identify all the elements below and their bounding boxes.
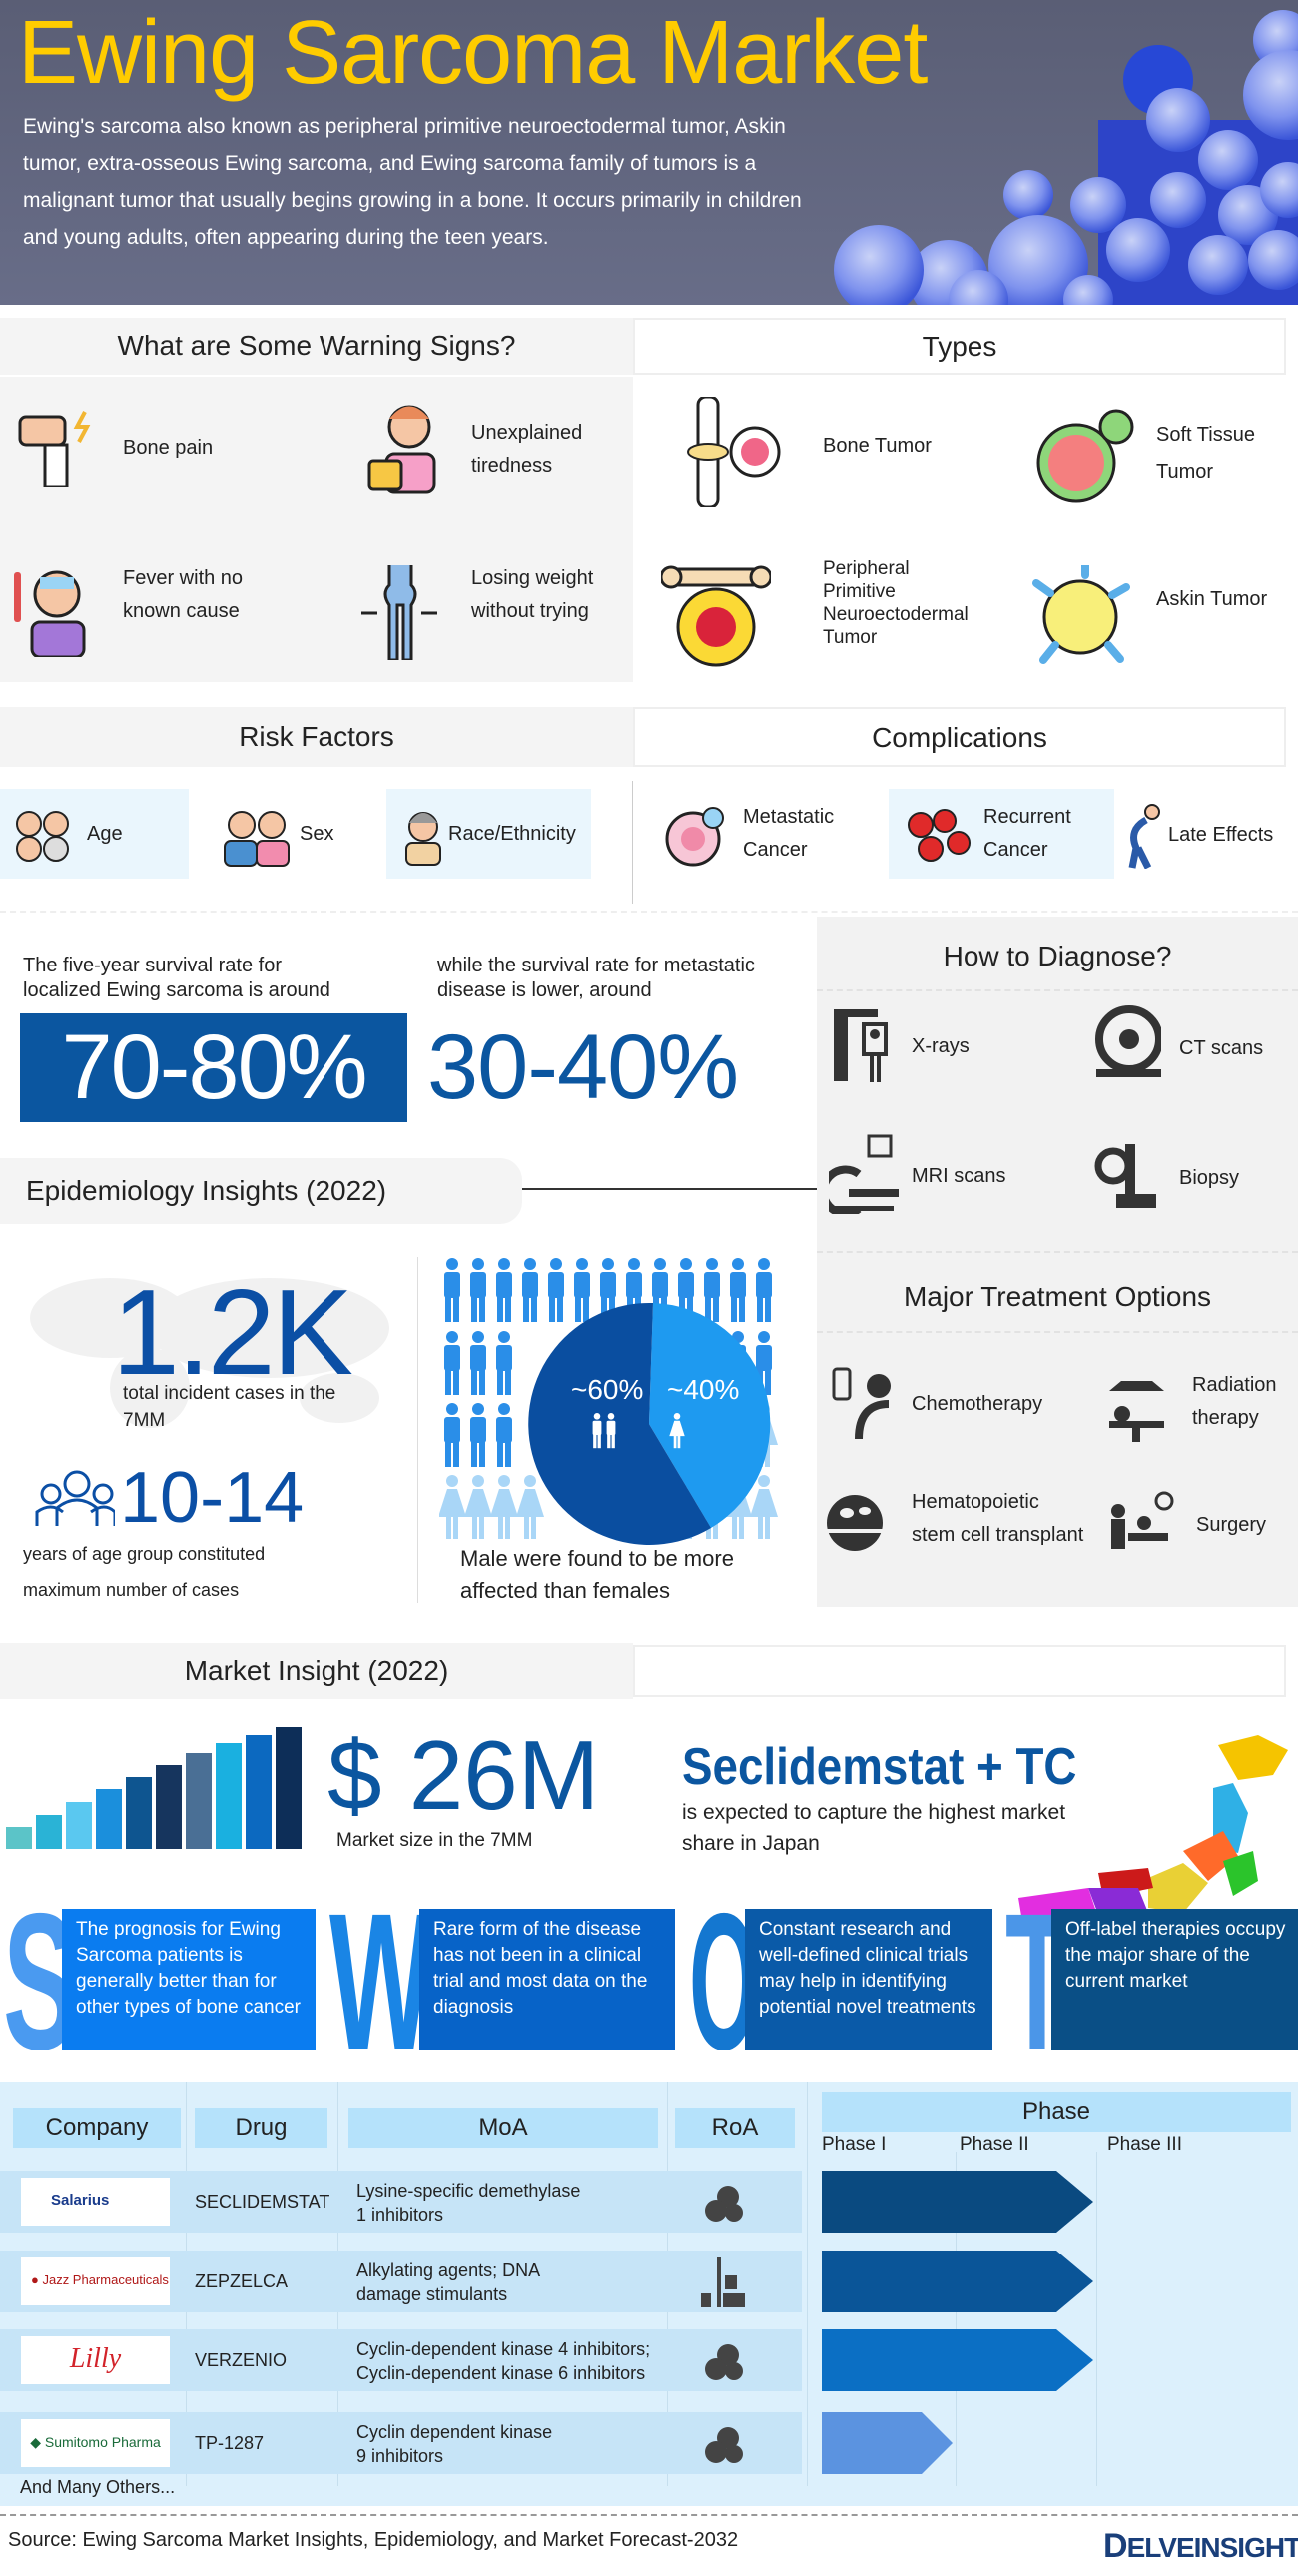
item: sex — [224, 811, 333, 867]
caption: gender — [460, 1546, 734, 1603]
stat: 10-14 — [23, 1458, 304, 1600]
source footnote: Source: Ewing Sarcoma Market Insights, Epidemiology, and Market Forecast-2032 — [8, 2529, 738, 2551]
icon: losing weight — [361, 565, 437, 660]
row: zepzelca: Alkylating agents; DNA — [356, 2260, 540, 2280]
item: hematopoietic stem cell transplant: stem cell transplant — [912, 1524, 1083, 1546]
row: seclidemstat — [0, 2171, 802, 2233]
table: pipeline: Drug — [235, 2114, 288, 2141]
survival localized text: The five-year survival rate for — [23, 955, 282, 976]
item: biopsy — [1094, 1144, 1239, 1208]
row: verzenio: Lilly — [70, 2343, 121, 2374]
item: x-rays — [834, 1009, 970, 1082]
table: pipeline: Phase I — [822, 2134, 886, 2155]
row: verzenio — [0, 2329, 802, 2391]
phase header: Phase — [1022, 2098, 1090, 2125]
survival metastatic text: while the survival rate for metastatic — [437, 955, 755, 976]
text: Market size in the 7MM — [336, 1830, 532, 1851]
heading: warning signs: What are Some Warning Signs? — [118, 330, 515, 361]
text: askin tumor: Askin Tumor — [1156, 588, 1267, 610]
stat: 1.2K: 7MM — [123, 1410, 165, 1431]
item: age: Age — [87, 823, 123, 845]
chart: gender pie with people grid: ~40% — [667, 1374, 739, 1405]
row: seclidemstat: Salarius — [51, 2192, 109, 2209]
row: verzenio: Cyclin-dependent kinase 4 inhibitors; — [356, 2339, 650, 2359]
table headers — [13, 2108, 181, 2148]
text: fever: Fever with no — [123, 567, 243, 589]
text: tiredness: Unexplained — [471, 422, 582, 444]
callout: seclidemstat — [682, 1738, 1076, 1855]
heading: types: Types — [923, 331, 996, 362]
heading: epidemiology — [0, 1158, 522, 1224]
swot: threats: Off-label therapies occupy the major share of the current market — [1065, 1919, 1285, 1992]
item: metastatic cancer — [665, 806, 834, 867]
table: pipeline: Phase III — [1107, 2134, 1182, 2155]
stat: 70-80%: 70-80% — [61, 1016, 366, 1118]
item: ct scans — [1095, 1005, 1263, 1077]
text: fever: known cause — [123, 600, 240, 622]
item: recurrent cancer: Cancer — [983, 839, 1047, 861]
icon: bone tumor — [687, 397, 781, 507]
item: age — [0, 789, 189, 879]
swot: strengths: The prognosis for Ewing Sarcoma patients is generally better than for other types of bone cancer — [76, 1919, 301, 2018]
text: PPNET — [823, 558, 969, 648]
item: mri scans — [829, 1134, 1005, 1214]
text: soft tissue tumor: Soft Tissue — [1156, 424, 1255, 446]
icon: soft tissue tumor — [1036, 409, 1134, 503]
item: recurrent cancer — [889, 789, 1114, 879]
icon: tiredness — [367, 405, 435, 493]
row: seclidemstat: Lysine-specific demethylase — [356, 2181, 580, 2201]
header banner — [0, 0, 1298, 305]
callout: seclidemstat: Seclidemstat + TC — [682, 1738, 1076, 1796]
item: race/ethnicity — [386, 789, 591, 879]
item: mri scans: MRI scans — [912, 1165, 1005, 1187]
item: race/ethnicity: Race/Ethnicity — [448, 823, 576, 845]
row: zepzelca: ● Jazz Pharmaceuticals — [31, 2272, 169, 2287]
stat: 30-40%: 30-40% — [427, 1016, 738, 1118]
swot: opportunities — [687, 1909, 992, 2050]
row: tp-1287: TP-1287 — [195, 2433, 264, 2453]
row: zepzelca: damage stimulants — [356, 2284, 507, 2304]
heading: major treatment options: Major Treatment Options — [904, 1281, 1211, 1312]
item: late effects: Late Effects — [1168, 824, 1273, 846]
text: tiredness — [471, 422, 582, 477]
icon: PPNET — [661, 565, 771, 667]
row: zepzelca: ZEPZELCA — [195, 2271, 288, 2291]
icon: bone pain — [18, 411, 90, 487]
item: chemotherapy: Chemotherapy — [912, 1393, 1042, 1415]
text: losing weight: without trying — [471, 600, 589, 622]
item: radiation therapy — [1109, 1374, 1277, 1442]
panel: complications — [633, 707, 1286, 879]
stat: $26M: $ 26M — [327, 1720, 599, 1830]
phase header — [822, 2092, 1291, 2132]
item: chemotherapy — [833, 1368, 1042, 1439]
logo: delveinsight: DELVEINSIGHT — [1103, 2527, 1298, 2565]
item: surgery: Surgery — [1196, 1514, 1266, 1536]
item: metastatic cancer: Metastatic — [743, 806, 834, 828]
table: pipeline: RoA — [712, 2114, 758, 2141]
item: x-rays: X-rays — [912, 1035, 970, 1057]
callout: seclidemstat: is expected to capture the highest market — [682, 1801, 1065, 1824]
row: seclidemstat: SECLIDEMSTAT — [195, 2192, 329, 2212]
item: hematopoietic stem cell transplant — [827, 1491, 1084, 1551]
stat: 1.2K: 1.2K — [112, 1264, 350, 1400]
survival metastatic text — [437, 955, 755, 1001]
heading: how to diagnose: How to Diagnose? — [944, 941, 1171, 971]
heading: risk factors: Risk Factors — [239, 721, 394, 752]
row: tp-1287: 9 inhibitors — [356, 2446, 443, 2466]
survival localized text — [23, 955, 330, 1001]
panel: diagnose & treatment — [817, 917, 1298, 1607]
icon: japan map — [1018, 1735, 1288, 1915]
stat: 1.2K: total incident cases in the — [123, 1383, 335, 1404]
text: tiredness: tiredness — [471, 455, 552, 477]
table: pipeline — [0, 2082, 1298, 2506]
text: soft tissue tumor: Tumor — [1156, 461, 1213, 483]
item: radiation therapy: Radiation — [1192, 1374, 1277, 1396]
heading: epidemiology: Epidemiology Insights (2022) — [26, 1175, 386, 1206]
item: metastatic cancer: Cancer — [743, 839, 807, 861]
caption: gender: Male were found to be more — [460, 1546, 734, 1571]
item: late effects — [1128, 804, 1273, 869]
item: recurrent cancer: Recurrent — [983, 806, 1071, 828]
row: tp-1287 — [0, 2412, 802, 2474]
text: bone pain: Bone pain — [123, 437, 213, 459]
icon: fever — [14, 571, 86, 657]
text: losing weight — [471, 567, 593, 622]
heading: risk factors — [0, 707, 633, 767]
text: bone tumor: Bone Tumor — [823, 435, 932, 457]
intro text: Ewing's sarcoma also known as peripheral primitive neuroectodermal tumor, Askin tumor, extra-osseous Ewing sarcoma, and Ewing sarcoma family of tumors is a malignant tumor that usually begins growing in a bone. It occurs primarily in children and young adults, often appearing during the teen years. — [23, 115, 802, 249]
text: PPNET: Neuroectodermal — [823, 604, 969, 625]
survival metastatic text: disease is lower, around — [437, 979, 652, 1001]
heading: types — [633, 318, 1286, 375]
item: biopsy: Biopsy — [1179, 1167, 1239, 1189]
text: and many others: And Many Others... — [20, 2477, 175, 2497]
decorative bubbles — [834, 10, 1298, 305]
swot: weaknesses — [324, 1909, 675, 2050]
panel: warning signs — [0, 318, 633, 682]
panel: risk factors — [0, 707, 633, 879]
text: losing weight: Losing weight — [471, 567, 593, 589]
row: tp-1287: Cyclin dependent kinase — [356, 2422, 552, 2442]
stat: 10-14: 10-14 — [120, 1458, 304, 1538]
swot: weaknesses: Rare form of the disease has not been in a clinical trial and most data on the diagnosis — [433, 1919, 647, 2018]
row: verzenio: Cyclin-dependent kinase 6 inhibitors — [356, 2363, 645, 2383]
survival localized text: localized Ewing sarcoma is around — [23, 979, 330, 1001]
heading: complications: Complications — [872, 722, 1047, 753]
chart: gender pie with people grid: ~60% — [571, 1374, 643, 1405]
row: zepzelca — [0, 2251, 802, 2312]
row: tp-1287: ◆ Sumitomo Pharma — [30, 2434, 161, 2450]
text: PPNET: Peripheral — [823, 558, 910, 579]
item: ct scans: CT scans — [1179, 1037, 1263, 1059]
bar chart: market growth — [6, 1727, 302, 1849]
heading: warning signs — [0, 318, 633, 375]
heading: complications — [633, 707, 1286, 767]
caption: gender: affected than females — [460, 1578, 670, 1603]
table: pipeline: Phase II — [960, 2134, 1029, 2155]
stat: 10-14: maximum number of cases — [23, 1580, 239, 1600]
swot: strengths — [3, 1909, 316, 2050]
swot: opportunities: Constant research and well-defined clinical trials may help in identifying potential novel treatments — [759, 1919, 976, 2018]
text: soft tissue tumor — [1156, 424, 1255, 483]
item: sex: Sex — [300, 823, 333, 845]
text: PPNET: Primitive — [823, 581, 896, 602]
chart: gender pie with people grid — [439, 1258, 778, 1603]
heading: market insight: Market Insight (2022) — [185, 1655, 448, 1686]
row: verzenio: VERZENIO — [195, 2350, 287, 2370]
table: pipeline: MoA — [478, 2114, 528, 2141]
stat: 10-14: years of age group constituted — [23, 1544, 265, 1564]
stat: 1.2K — [30, 1264, 389, 1431]
item: surgery — [1111, 1492, 1266, 1549]
item: hematopoietic stem cell transplant: Hematopoietic — [912, 1491, 1039, 1513]
row: seclidemstat: 1 inhibitors — [356, 2205, 443, 2225]
item: radiation therapy: therapy — [1192, 1407, 1259, 1429]
heading: market insight — [0, 1643, 1286, 1699]
panel: types — [633, 318, 1286, 667]
icon: askin tumor — [1032, 565, 1130, 664]
swot: threats — [1003, 1909, 1298, 2050]
text: PPNET: Tumor — [823, 627, 877, 648]
phase arrows — [822, 2171, 1101, 2480]
callout: seclidemstat: share in Japan — [682, 1832, 820, 1855]
title: Ewing Sarcoma Market — [18, 3, 927, 103]
table headers: Company — [46, 2114, 148, 2141]
text: fever — [123, 567, 243, 622]
